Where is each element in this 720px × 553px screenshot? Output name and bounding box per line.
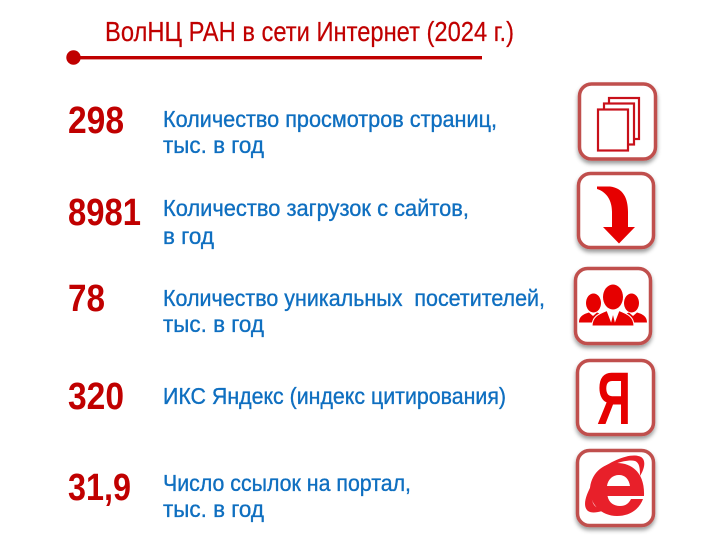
title: ВолНЦ РАН в сети Интернет (2024 г.) [105, 16, 514, 47]
row 4: Yandex index: 320 [68, 376, 124, 418]
icon: browser e [578, 450, 654, 526]
row 4: Yandex index [68, 376, 506, 418]
icon: pages [580, 84, 656, 159]
row 5: links: Число ссылок на портал, [163, 470, 411, 496]
row 1: page views: тыс. в год [163, 132, 265, 158]
row 2: downloads: Количество загрузок с сайтов, [163, 195, 469, 221]
row 1: page views [68, 100, 497, 158]
title rule with dot [66, 50, 482, 65]
row 1: page views: 298 [68, 100, 124, 142]
row 2: downloads: 8981 [68, 192, 141, 234]
row 4: Yandex index: ИКС Яндекс (индекс цитирования) [163, 383, 506, 409]
row 2: downloads [68, 192, 469, 249]
icon: people [576, 268, 650, 344]
row 3: unique visitors: Количество уникальных посетителей, [163, 285, 545, 311]
icon: Yandex letter [578, 357, 654, 440]
icon: download arrow [578, 174, 654, 248]
row 3: unique visitors [68, 278, 545, 337]
row 1: page views: Количество просмотров страниц, [163, 106, 497, 132]
row 5: links: 31,9 [68, 467, 131, 509]
row 5: links [68, 467, 411, 522]
icon: Yandex letter: Я [597, 357, 631, 440]
row 2: downloads: в год [163, 223, 215, 249]
row 3: unique visitors: тыс. в год [163, 311, 265, 337]
row 5: links: тыс. в год [163, 496, 265, 522]
row 3: unique visitors: 78 [68, 278, 105, 320]
